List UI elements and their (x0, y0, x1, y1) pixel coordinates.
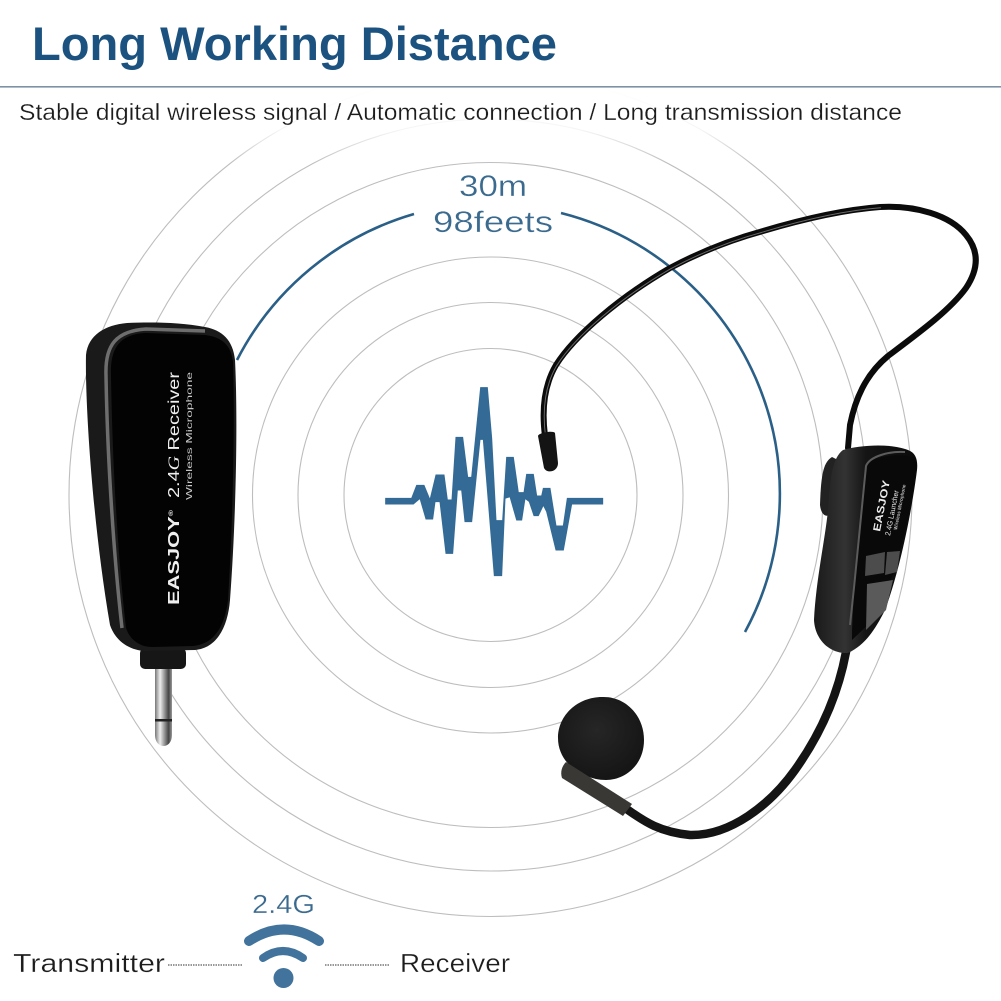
distance label (433, 170, 553, 239)
microphone head (558, 697, 644, 816)
transmitter face (852, 455, 916, 640)
receiver caption: Receiver (400, 948, 510, 978)
receiver glossy face (111, 333, 234, 647)
receiver jack plug (140, 648, 186, 746)
transmitter label: EASJOY (871, 479, 893, 533)
transmitter buttons (865, 551, 900, 630)
transmitter highlight edge (850, 452, 905, 625)
icon: wifi (249, 930, 319, 988)
dotted connector right (325, 964, 389, 966)
metal capsule (561, 762, 632, 816)
transmitter device (814, 445, 917, 653)
receiver label (166, 372, 194, 605)
wifi label: 2.4G (252, 889, 315, 919)
distance arc (237, 213, 780, 632)
receiver label: Wireless Microphone (184, 372, 194, 500)
icon: sound wave (386, 388, 603, 576)
transmitter clip (820, 457, 838, 516)
distance label: 30m (459, 170, 527, 203)
transmitter label (871, 479, 908, 536)
transmitter label: Transmitter (13, 948, 165, 978)
microphone boom (628, 652, 846, 835)
headset wire end cap (538, 432, 558, 471)
receiver device (86, 322, 236, 746)
distance label: 98feets (433, 206, 553, 239)
transmitter label: Wireless Microphone (893, 484, 908, 530)
header divider (0, 86, 1001, 88)
headset wire (544, 207, 976, 448)
receiver highlight edge (106, 329, 205, 628)
subtitle: Stable digital wireless signal / Automatic connection / Long transmission distance (19, 99, 902, 125)
title: Long Working Distance (32, 17, 557, 70)
transmitter label: 2.4G Launcher (883, 489, 901, 536)
foam windscreen (558, 697, 644, 780)
receiver label: 2.4G Receiver (166, 372, 183, 498)
dotted connector left (168, 964, 242, 966)
transmitter body (814, 445, 917, 653)
receiver label: EASJOY (166, 542, 183, 605)
receiver body (86, 322, 236, 651)
receiver label: ® (168, 509, 175, 516)
